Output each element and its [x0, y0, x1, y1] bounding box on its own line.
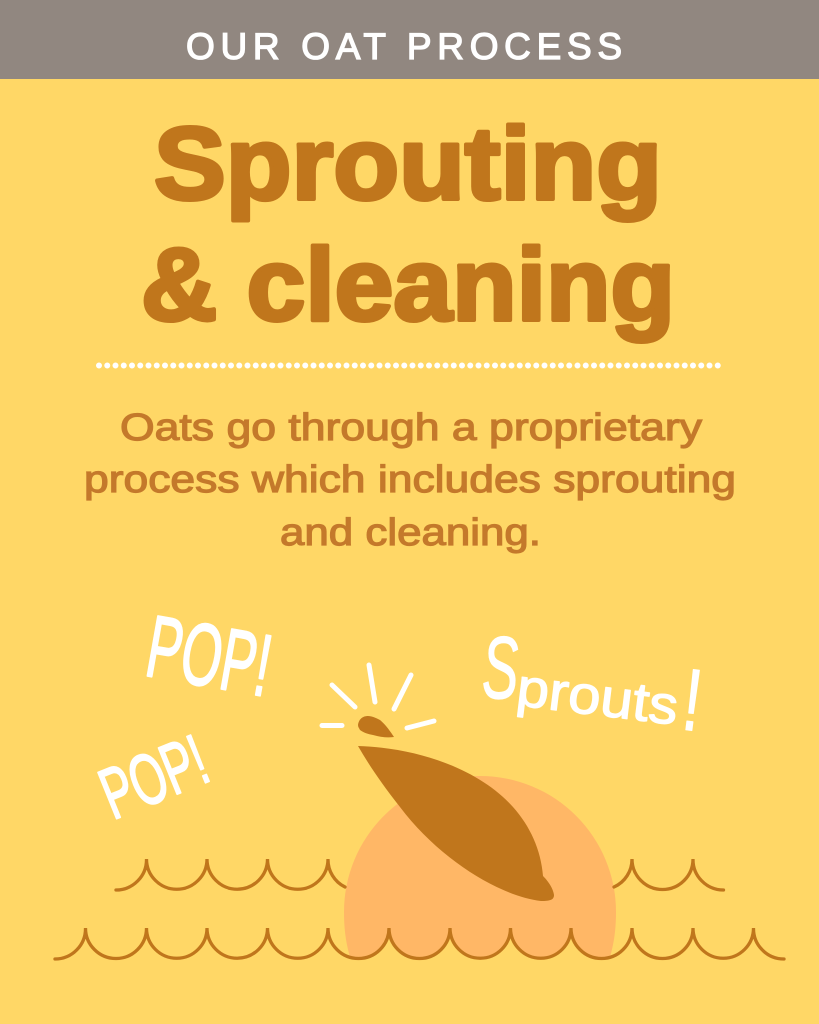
upper wave line — [116, 859, 724, 890]
title: Sprouting — [154, 106, 662, 221]
hand lettering: POP! large: POP! — [140, 596, 279, 715]
hand lettering: Sprouts!: prouts — [514, 656, 682, 736]
burst lines — [322, 665, 434, 728]
header band: OUR OAT PROCESS — [186, 26, 622, 67]
oat tip — [358, 716, 394, 737]
header band — [0, 0, 819, 79]
description text: process which includes sprouting — [84, 459, 736, 501]
hand lettering: Sprouts!: S — [482, 619, 519, 717]
hand lettering: Sprouts! — [482, 619, 708, 750]
description text: Oats go through a proprietary — [120, 407, 702, 449]
hand lettering: POP! small: POP! — [89, 720, 219, 835]
description text: and cleaning. — [280, 512, 541, 554]
hand lettering: Sprouts!: ! — [678, 650, 708, 750]
title — [141, 106, 675, 342]
title: & cleaning — [141, 227, 675, 342]
oat body — [358, 746, 554, 901]
lower wave line — [55, 928, 784, 959]
description text — [84, 407, 736, 554]
illustration: sprouting oat over waves — [55, 665, 784, 959]
peach circle — [344, 776, 616, 958]
dotted divider — [99, 362, 718, 368]
